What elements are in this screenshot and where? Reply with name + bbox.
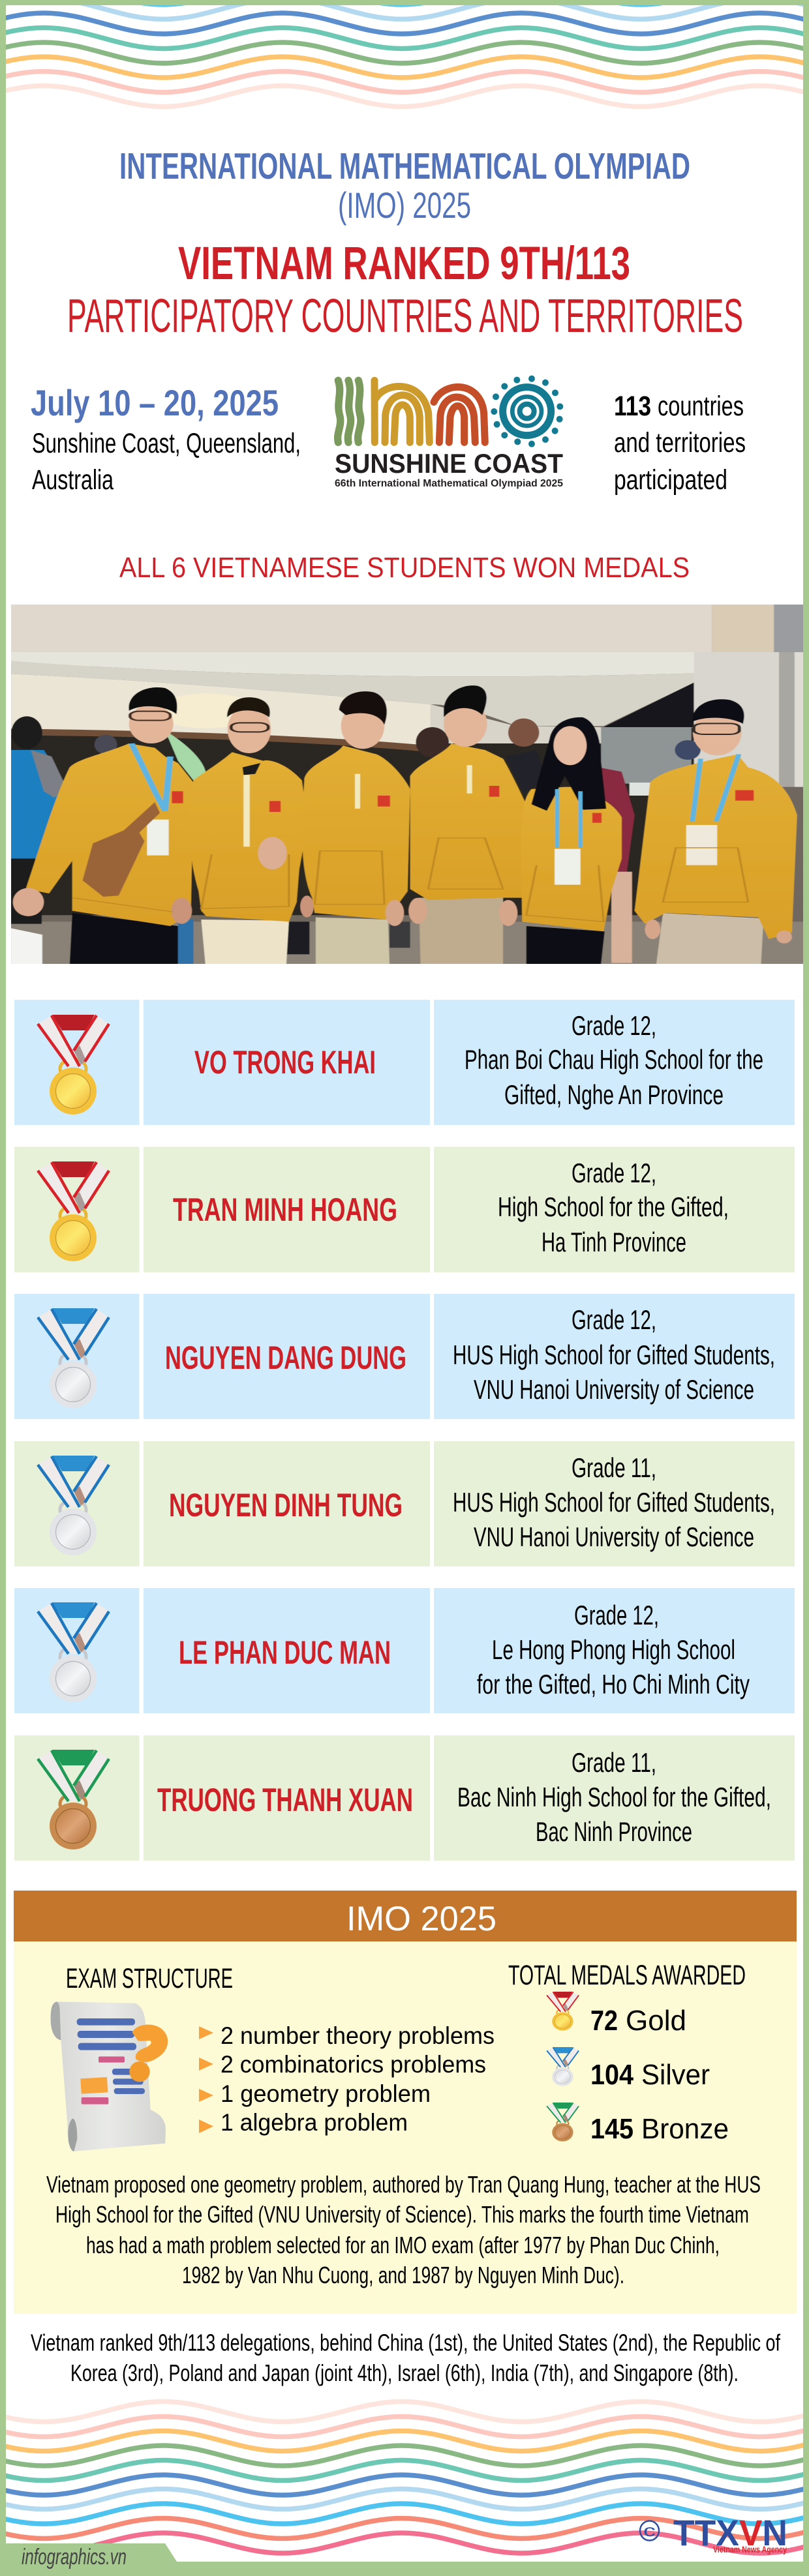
medal count: silver: 104: [590, 2059, 633, 2091]
icon: gold medal: [38, 1161, 109, 1261]
school details: [477, 1600, 750, 1700]
top wave decoration: [0, 0, 809, 107]
exam problem list: 1 geometry problem: [221, 2080, 431, 2107]
student 5: [521, 787, 622, 931]
bottom wave decoration: [0, 2401, 809, 2553]
student 4: [410, 743, 527, 900]
school details: Grade 12,: [572, 1158, 656, 1188]
school details: Grade 11,: [572, 1452, 656, 1483]
icon: silver medal: [38, 1602, 109, 1702]
medal count: silver: Silver: [641, 2059, 710, 2091]
medal count: bronze: Bronze: [641, 2113, 729, 2145]
text block: participating countries: participated: [614, 464, 727, 496]
title: (IMO) 2025: [338, 185, 471, 226]
table row: Le Phan Duc Man: [14, 1588, 795, 1713]
background people: [11, 750, 65, 859]
student name: TRAN MINH HOANG: [173, 1191, 397, 1228]
school details: [498, 1158, 729, 1257]
student 3: [302, 745, 410, 920]
trousers: [70, 913, 178, 964]
student name: NGUYEN DANG DUNG: [165, 1340, 406, 1376]
hoodie pockets: [72, 838, 748, 921]
logo: Sunshine Coast IMO 2025: SUNSHINE COAST: [335, 448, 563, 479]
icon: exam scroll with question mark: [51, 2001, 168, 2151]
text block: participating countries: [614, 391, 746, 496]
icon: gold medal: [38, 1015, 109, 1115]
exam problem list: 2 combinatorics problems: [221, 2051, 486, 2078]
school details: [453, 1304, 775, 1405]
school details: Gifted, Nghe An Province: [504, 1079, 724, 1110]
table row: Tran Minh Hoang: [14, 1146, 795, 1272]
white shopping bag: [11, 928, 42, 964]
table row: Vo Trong Khai: [14, 1000, 795, 1125]
exam problem list: 2 number theory problems: [221, 2022, 495, 2049]
medal count: gold: 72: [590, 2005, 618, 2037]
panel header bar: IMO 2025: [346, 1900, 496, 1938]
logo: TTXVN Vietnam News Agency: Vietnam News Agency: [713, 2544, 787, 2554]
school details: [465, 1010, 763, 1110]
school details: Bac Ninh Province: [536, 1816, 692, 1847]
table row: Nguyen Dinh Tung: [14, 1441, 795, 1566]
text block: proposed problem: 1982 by Van Nhu Cuong, and 1987 by Nguyen Minh Duc).: [182, 2262, 624, 2288]
student name: NGUYEN DINH TUNG: [169, 1487, 403, 1523]
footer tab: infographics.vn: infographics.vn: [22, 2545, 127, 2569]
text block: participating countries: and territories: [614, 427, 746, 458]
student name: LE PHAN DUC MAN: [179, 1634, 391, 1671]
exam problem list: 1 algebra problem: [221, 2109, 408, 2136]
group photo illustration: [0, 603, 809, 966]
medal count: gold: Gold: [626, 2005, 686, 2037]
school details: Ha Tinh Province: [542, 1227, 686, 1257]
school details: Grade 12,: [572, 1010, 656, 1041]
icon: silver medal: [38, 1456, 109, 1555]
student 1: [26, 743, 194, 926]
logo: TTXVN Vietnam News Agency: TTXVN: [673, 2512, 787, 2553]
text block: participating countries: 113: [614, 391, 651, 422]
medal count: bronze: 145: [590, 2113, 633, 2145]
medal count: gold: [547, 1992, 686, 2037]
exam problem list: [199, 2022, 495, 2136]
title: [67, 145, 743, 342]
title: VIETNAM RANKED 9TH/113: [178, 238, 630, 290]
text block: proposed problem: [46, 2171, 761, 2288]
student 6: [635, 755, 797, 939]
heading: exam structure: EXAM STRUCTURE: [66, 1963, 233, 1994]
text block: date and venue: [31, 382, 301, 496]
icon: bronze medal: [38, 1750, 109, 1850]
table row: Nguyen Dang Dung: [14, 1294, 795, 1419]
school details: Grade 12,: [572, 1304, 656, 1335]
panel header bar: [14, 1891, 797, 1941]
school details: [453, 1452, 775, 1552]
text block: date and venue: Sunshine Coast, Queensland,: [32, 428, 301, 459]
icon: silver medal: [38, 1308, 109, 1408]
text block: ranking: [31, 2329, 781, 2386]
school details: [457, 1747, 771, 1847]
panel: IMO 2025: [14, 1891, 797, 2314]
medal count: bronze: [547, 2103, 729, 2145]
student 2: [189, 752, 308, 921]
student name: VO TRONG KHAI: [194, 1044, 376, 1081]
school details: Grade 12,: [574, 1600, 659, 1630]
student name: TRUONG THANH XUAN: [157, 1782, 413, 1818]
table row: Truong Thanh Xuan: [14, 1735, 795, 1861]
text block: date and venue: July 10 – 20, 2025: [31, 382, 279, 423]
school details: Grade 11,: [572, 1747, 656, 1778]
logo: Sunshine Coast IMO 2025: 66th International Mathematical Olympiad 2025: [335, 478, 563, 489]
medal count: silver: [547, 2047, 710, 2091]
logo: TTXVN Vietnam News Agency: c: [643, 2521, 656, 2540]
text block: participating countries: countries: [658, 391, 744, 422]
heading: all 6 students won medals: ALL 6 VIETNAMESE STUDENTS WON MEDALS: [119, 552, 690, 584]
logo: Sunshine Coast IMO 2025: [335, 376, 563, 489]
text block: date and venue: Australia: [32, 464, 114, 496]
